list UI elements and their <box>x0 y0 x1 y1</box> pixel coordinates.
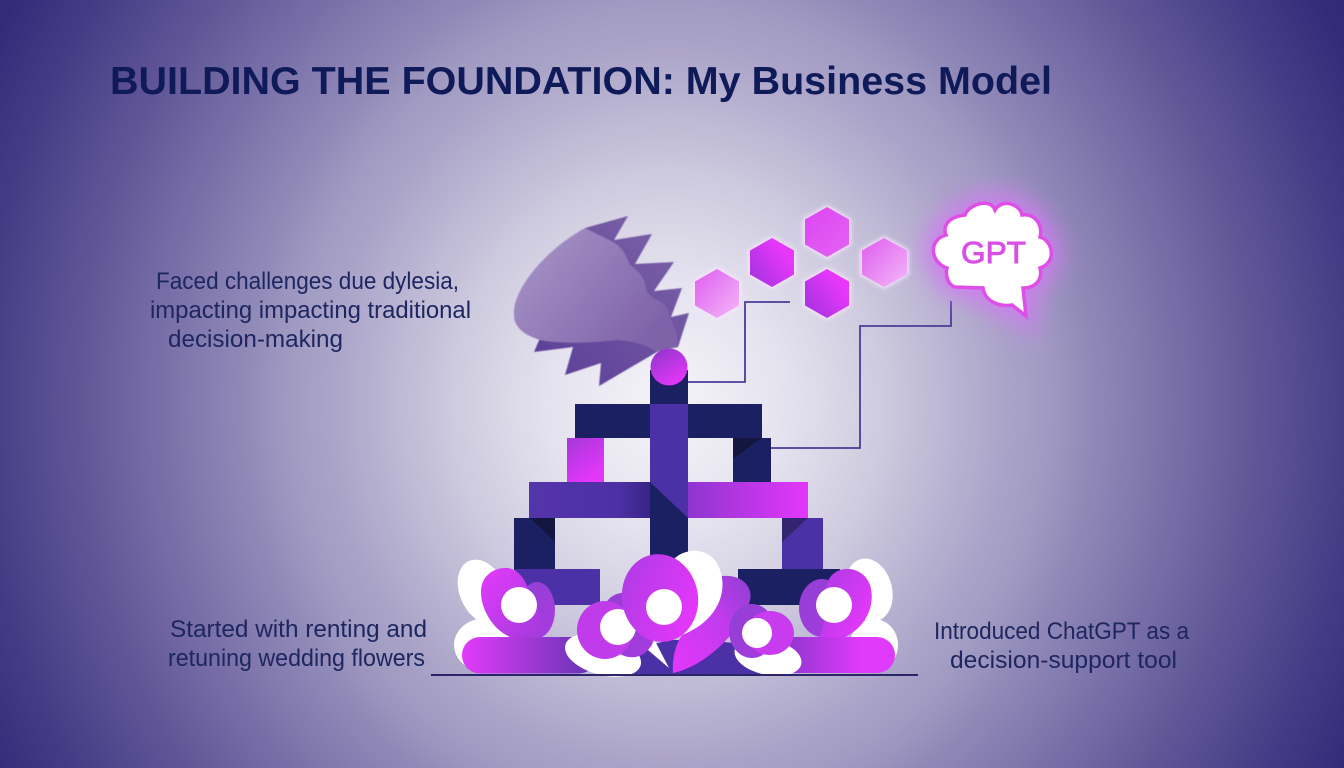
central column <box>650 404 688 518</box>
title: BUILDING THE FOUNDATION: My Business Model <box>110 60 1052 103</box>
text block: wedding flowers: retuning wedding flowers <box>168 645 425 672</box>
icon: hexagon 2 <box>750 238 794 287</box>
icon: hexagon 4 <box>805 269 849 318</box>
icon: hexagon 1 <box>695 269 739 318</box>
arrow: connector to hexagons <box>686 302 790 382</box>
icon: GPT speech cloud: GPT <box>961 235 1026 270</box>
icon: top ball <box>650 348 688 386</box>
middle left bar <box>529 482 650 518</box>
icon: GPT speech cloud <box>933 203 1051 316</box>
text block: ChatGPT: decision-support tool <box>950 647 1177 674</box>
bottom left bar <box>515 569 600 605</box>
tower structure <box>514 370 840 605</box>
right dark block <box>733 438 771 482</box>
flower group <box>448 548 899 684</box>
flower 3 centre <box>615 548 751 673</box>
text block: challenges: impacting impacting traditional <box>150 297 471 324</box>
lower right leg <box>782 518 823 570</box>
flower 1 left <box>448 551 597 674</box>
text block: wedding flowers <box>168 616 427 672</box>
central base <box>600 640 790 674</box>
icon: hexagon 3 <box>805 207 849 257</box>
text block: wedding flowers: Started with renting and <box>170 616 427 643</box>
text block: challenges: decision-making <box>168 326 343 353</box>
baseline <box>431 674 918 676</box>
icon: hexagon 5 <box>862 238 907 287</box>
icon: torn leaf <box>514 216 689 386</box>
text block: ChatGPT <box>934 618 1190 674</box>
flower 5 right <box>780 553 899 673</box>
lower left leg <box>514 518 555 570</box>
text block: challenges: Faced challenges due dylesia, <box>156 268 459 295</box>
hexagon cluster <box>693 205 909 320</box>
arrow: connector to GPT bubble <box>769 301 951 448</box>
left magenta block <box>567 438 604 482</box>
flower 2 <box>560 585 669 684</box>
text block: challenges <box>150 268 471 353</box>
middle right bar <box>688 482 808 518</box>
flower 4 <box>729 604 805 682</box>
top bar <box>575 404 762 438</box>
top post <box>650 370 688 404</box>
text block: ChatGPT: Introduced ChatGPT as a <box>934 618 1190 645</box>
bottom right bar <box>738 569 840 605</box>
